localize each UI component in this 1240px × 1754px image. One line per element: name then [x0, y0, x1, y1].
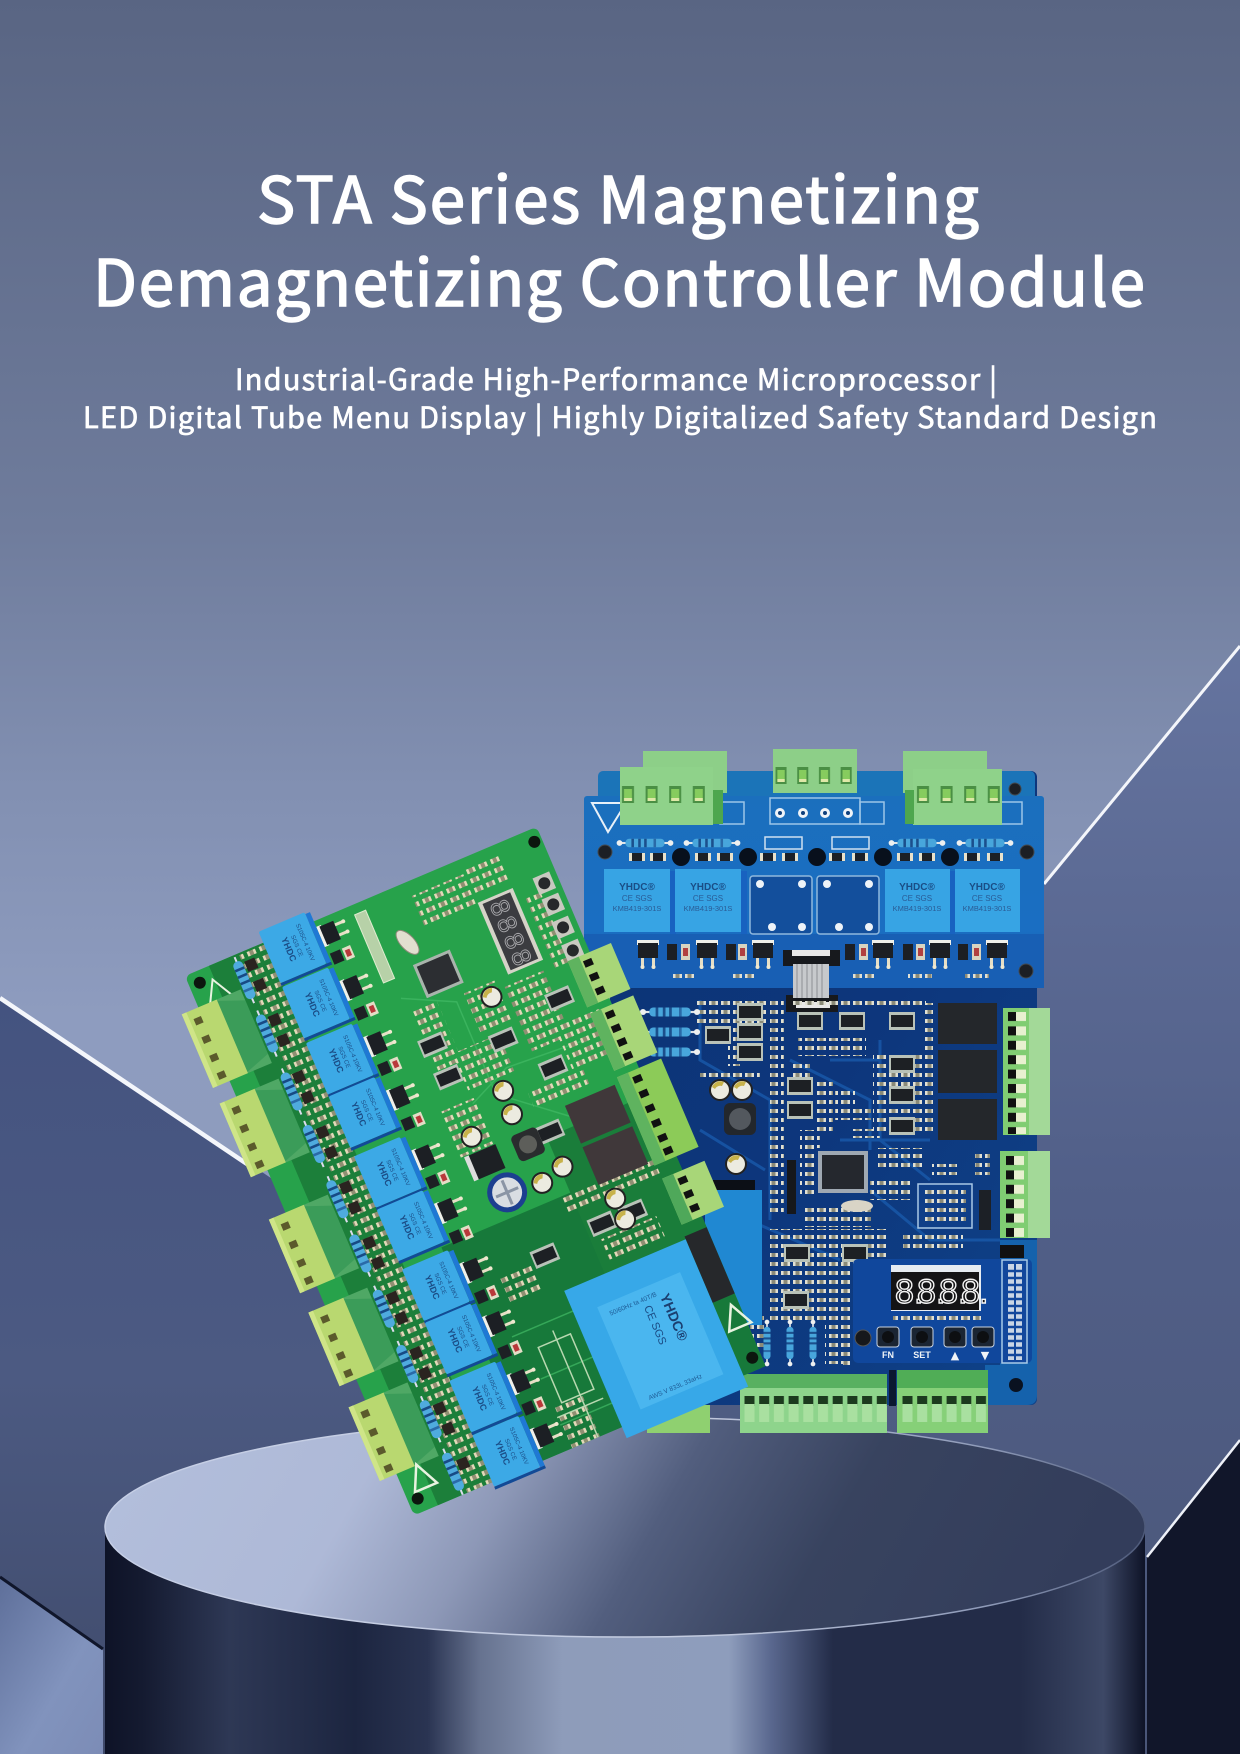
current sensor relay 4: [955, 869, 1020, 932]
relay markings: SGS CE: [336, 1046, 351, 1069]
relay markings: YHDC: [445, 1327, 465, 1355]
pin header: [787, 1160, 796, 1214]
relay markings: S105C-4 10KV: [437, 1261, 458, 1300]
resistors column: [230, 955, 467, 1497]
corner hole: [1009, 1378, 1023, 1392]
current sensor relay 1: YHDC®: [619, 882, 655, 893]
upper relay board: [584, 783, 1044, 988]
dark relay-side region: [547, 1094, 709, 1276]
small dark parts column: [244, 957, 470, 1471]
tactile buttons: [533, 871, 585, 962]
background: lower-left panel dark edge: [0, 1577, 103, 1649]
mounting screw: [855, 1330, 871, 1346]
dark left strip: [209, 942, 495, 1505]
relay markings: S105C-4 10KV: [485, 1372, 506, 1411]
transistor row: [637, 940, 1008, 979]
transformer: AWS V 833L 33aHz: [648, 1373, 703, 1402]
small black part: [979, 1190, 991, 1230]
pad clusters: [239, 834, 753, 1493]
relay markings: YHDC: [493, 1439, 512, 1467]
black output relay 2: [938, 1050, 997, 1093]
buttons: [877, 1327, 994, 1347]
title: STA Series Magnetizing: [257, 150, 979, 242]
background: lower-left panel: [0, 1577, 103, 1754]
relay markings: S105C-4 10KV: [508, 1427, 529, 1466]
relay markings: [276, 923, 529, 1473]
background: left floor plane: [0, 998, 614, 1754]
lower-right white edge line: [1147, 1440, 1240, 1557]
cylinder podium: [105, 1417, 1145, 1754]
title: Demagnetizing Controller Module: [93, 233, 1145, 325]
footprint outlines: [525, 1323, 616, 1449]
hazard triangle upper left: [202, 975, 232, 1004]
current sensor relay 3: [885, 869, 955, 934]
lower board light edge: [985, 1240, 1037, 1405]
bottom connector rear: [647, 1400, 710, 1433]
right-side terminal 3: [617, 1059, 699, 1166]
current sensor relay 1: [604, 869, 676, 934]
green relay board: [164, 806, 792, 1533]
ribbon cable: [783, 950, 840, 1012]
current sensor relay 2: CE SGS: [693, 894, 723, 903]
current sensor relay 2: KMB419-301S: [684, 904, 732, 913]
small black box: [1000, 1245, 1024, 1258]
blue relays column: [259, 910, 546, 1490]
relay markings: SGS CE: [359, 1099, 373, 1123]
transformer: 50/60Hz ta 40T/B: [609, 1291, 658, 1318]
front top connector right: [905, 769, 1005, 825]
transformer: YHDC®: [657, 1291, 692, 1344]
transformer: [564, 1239, 748, 1438]
current sensor relay 4: CE SGS: [972, 894, 1002, 903]
small parts and red diodes: [330, 945, 547, 1417]
black bar above blue block: [713, 1180, 755, 1190]
resistors lower: [640, 1048, 700, 1056]
button labels: SET: [913, 1350, 931, 1360]
lower board components: [640, 999, 1024, 1366]
large capacitor: [481, 1166, 533, 1219]
display bezel: [891, 1265, 981, 1311]
relay markings: YHDC: [279, 936, 299, 963]
microcontroller: [413, 949, 464, 998]
display digits: 8.8.8.8.: [895, 1273, 988, 1311]
black output relay 1: [938, 1003, 997, 1044]
relay markings: SGS CE: [455, 1326, 469, 1349]
relay markings: SGS CE: [432, 1272, 447, 1296]
lower board: [610, 771, 1037, 1405]
inductor: [724, 1103, 756, 1135]
relay markings: YHDC: [397, 1214, 417, 1241]
background: left white edge line: [0, 998, 250, 1166]
transistors column: [316, 915, 565, 1450]
current sensor relay 4: YHDC®: [969, 882, 1005, 893]
subtitle: Industrial-Grade High-Performance Microprocessor |: [235, 357, 997, 399]
center top connector pins: [773, 767, 857, 785]
crystal: [841, 1200, 873, 1212]
black mounting holes: [672, 848, 959, 866]
subtitle: [83, 357, 1157, 437]
button labels: FN: [882, 1350, 894, 1360]
pin header: [1002, 1260, 1027, 1363]
resistors: [640, 1008, 700, 1016]
black component near transformer: [685, 1227, 735, 1303]
button labels: ▲: [951, 1349, 960, 1362]
dark lower region: [441, 1149, 766, 1465]
microcontroller: [818, 1151, 868, 1193]
inductor: [510, 1126, 546, 1163]
current sensor relay 3: YHDC®: [899, 882, 935, 893]
button labels: ▼: [981, 1349, 990, 1362]
right connector lower: [1000, 1151, 1050, 1238]
right connector upper: [1003, 1008, 1050, 1135]
current sensor relay 3: CE SGS: [902, 894, 932, 903]
sensor module: [918, 1184, 972, 1228]
integrated circuits: [705, 1003, 915, 1309]
crystal: [392, 927, 423, 958]
relay markings: YHDC: [349, 1100, 369, 1128]
background: right white edge line: [1044, 646, 1240, 884]
relay markings: YHDC: [470, 1385, 489, 1413]
blue controller board: [584, 749, 1050, 1433]
electrolytic capacitors: [410, 968, 640, 1276]
hazard sign: [592, 803, 626, 832]
relay markings: YHDC: [375, 1160, 394, 1188]
relay markings: S105C-4 10KV: [412, 1201, 433, 1240]
traces: [373, 940, 717, 1429]
relay markings: SGS CE: [503, 1438, 517, 1461]
display pads: [893, 1312, 981, 1321]
right-side terminal 1: [568, 943, 630, 1007]
current sensor relay 1: KMB419-301S: [613, 904, 661, 913]
mounting holes: [191, 833, 761, 1507]
green PCB base: [185, 827, 766, 1515]
empty relay footprints: [750, 876, 879, 934]
relay markings: SGS CE: [384, 1159, 399, 1182]
relay markings: SGS CE: [289, 935, 303, 958]
lower board traces: [700, 1000, 1000, 1260]
current sensor relay 4: KMB419-301S: [963, 904, 1011, 913]
cylinder top face: [105, 1417, 1145, 1637]
right-side terminal 2: [590, 995, 657, 1071]
resistor row: [617, 837, 1013, 849]
display sub-board: [853, 1259, 1032, 1363]
back board top strip: [598, 771, 1035, 811]
relay markings: SGS CE: [407, 1213, 421, 1236]
hazard triangle: [405, 1460, 437, 1492]
front bottom connector right: [897, 1370, 988, 1433]
terminal holes: [775, 808, 853, 818]
black output relay 3: [938, 1099, 997, 1140]
relay markings: YHDC: [327, 1047, 346, 1075]
relay markings: YHDC: [423, 1273, 442, 1301]
relay markings: S105C-4 10KV: [294, 923, 315, 962]
right-side terminal 4: [662, 1161, 724, 1225]
current sensor relay 1: CE SGS: [622, 894, 652, 903]
button labels: [882, 1349, 990, 1362]
terminal outline: [720, 798, 1022, 824]
yellow-green terminals: [182, 989, 439, 1481]
hazard triangle lower right: [720, 1300, 751, 1332]
current sensor relay 2: [675, 869, 747, 934]
current sensor relay 3: KMB419-301S: [893, 904, 941, 913]
transformer: CE SGS: [641, 1304, 668, 1347]
blue transformer block behind green board: [705, 1190, 762, 1325]
resistors middle: [640, 1028, 700, 1036]
relay markings: S105C-4 10KV: [460, 1314, 481, 1353]
front top connector left: [620, 767, 723, 825]
black power relays: [565, 1085, 648, 1185]
background: lower-right dark panel: [1147, 1440, 1240, 1754]
screws: [598, 783, 1034, 978]
silk strip: [355, 910, 395, 983]
vertical resistor group: [764, 1320, 816, 1366]
four-digit LED display: 8888: [484, 895, 538, 970]
relay markings: S105C-4 10KV: [389, 1148, 410, 1187]
rear top connectors: [643, 749, 987, 793]
cylinder body: [105, 1527, 1145, 1754]
pad clusters: [697, 999, 990, 1365]
title: [93, 150, 1145, 325]
front bottom connector left: [740, 1374, 887, 1433]
current sensor relay 2: YHDC®: [690, 882, 726, 893]
relay markings: SGS CE: [480, 1384, 494, 1407]
relay markings: S105C-4 10KV: [341, 1034, 362, 1074]
background: right floor plane: [614, 646, 1240, 1754]
relay markings: S105C-4 10KV: [364, 1088, 385, 1127]
ICs: [415, 979, 665, 1278]
relay markings: S105C-4 10KV: [317, 978, 338, 1017]
electrolytic capacitors: [709, 1079, 753, 1175]
connector gap divider: [889, 1370, 896, 1406]
relay markings: SGS CE: [312, 990, 327, 1013]
small transistor row: [629, 853, 1003, 861]
subtitle: LED Digital Tube Menu Display | Highly Digitalized Safety Standard Design: [83, 395, 1157, 437]
relay markings: YHDC: [303, 991, 322, 1019]
